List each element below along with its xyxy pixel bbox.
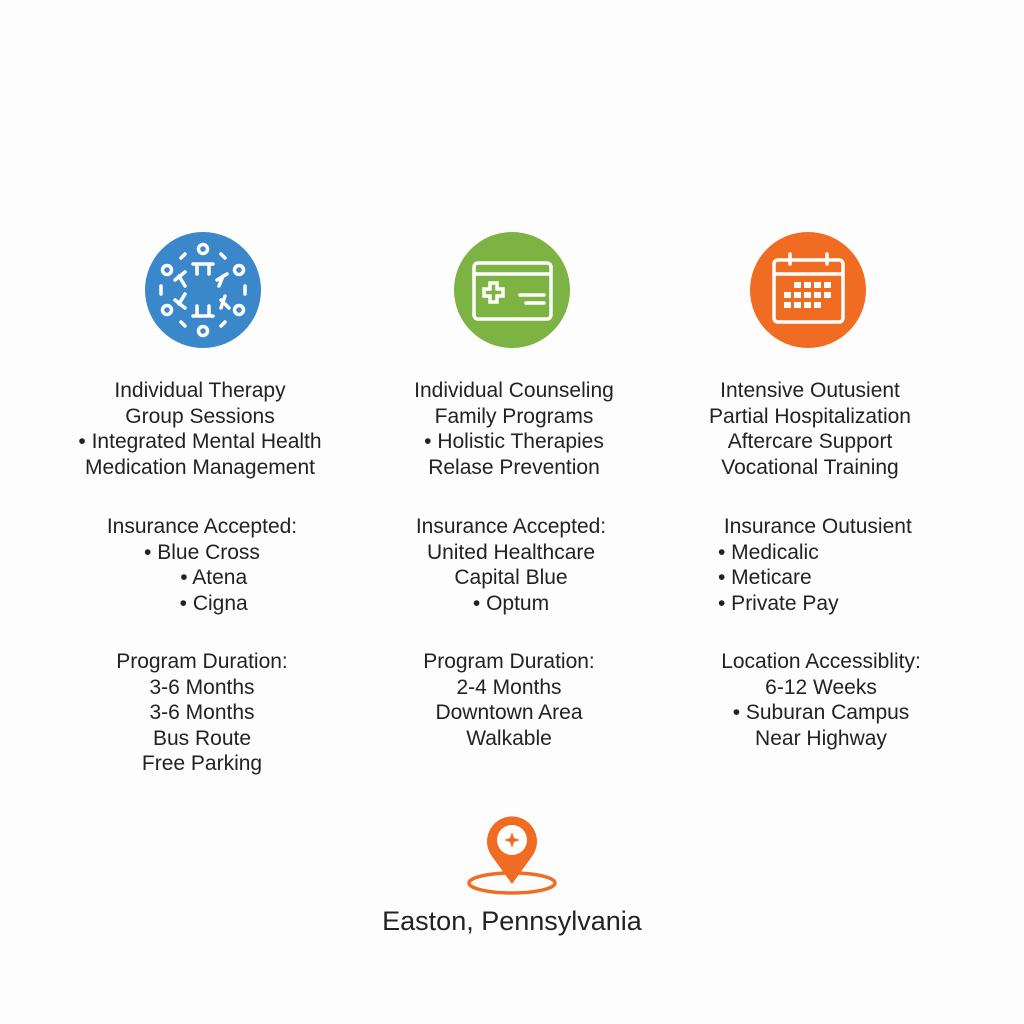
text: column 1 duration: 3-6 Months	[149, 676, 255, 698]
text: column 3 location: • Suburan Campus	[733, 701, 909, 724]
text: column 3 insurance: • Private Pay	[718, 592, 839, 614]
text: column 2 duration	[423, 650, 595, 750]
text: column 1 services	[78, 379, 322, 478]
text: column 1 duration: Program Duration:	[116, 650, 288, 673]
text: column 3 services: Aftercare Support	[728, 430, 892, 453]
text: column 1 duration: Bus Route	[153, 726, 251, 750]
text: column 1 services: Medication Management	[85, 456, 315, 478]
text: column 3 insurance: Insurance Outusient	[724, 515, 912, 538]
text: column 1 duration	[116, 650, 288, 775]
text: column 3 services: Partial Hospitalization	[709, 404, 911, 428]
text: column 2 insurance: Capital Blue	[454, 566, 568, 589]
icon: group circle	[145, 232, 261, 348]
icon: location pin	[467, 816, 557, 895]
text: column 2 duration: Program Duration:	[423, 650, 595, 673]
text: column 1 services: • Integrated Mental Health	[78, 430, 322, 453]
text: column 1 insurance: • Cigna	[180, 592, 248, 614]
text: column 1 insurance: Insurance Accepted:	[107, 515, 297, 538]
text: column 2 services: Relase Prevention	[428, 456, 600, 478]
text: column 1 insurance: • Atena	[180, 566, 247, 589]
text: column 2 services: • Holistic Therapies	[424, 430, 604, 453]
text: column 2 services	[414, 379, 614, 478]
text: column 1 duration: 3-6 Months	[149, 701, 255, 724]
text: column 3 location: Location Accessiblity:	[721, 650, 921, 673]
text: column 3 services	[709, 379, 911, 478]
icon: calendar	[750, 232, 866, 348]
text: column 1 duration: Free Parking	[142, 752, 262, 775]
text: column 2 services: Individual Counseling	[414, 379, 614, 402]
title: location: Easton, Pennsylvania	[382, 906, 642, 936]
text: column 2 insurance: United Healthcare	[427, 540, 595, 564]
text: column 2 services: Family Programs	[435, 404, 593, 428]
text: column 3 insurance	[718, 515, 912, 614]
text: column 3 services: Intensive Outusient	[720, 379, 900, 402]
text: column 3 location	[721, 650, 921, 750]
text: column 3 location: 6-12 Weeks	[765, 676, 877, 698]
text: column 1 insurance: • Blue Cross	[144, 540, 260, 564]
text: column 1 services: Group Sessions	[125, 404, 275, 428]
text: column 1 insurance	[107, 515, 297, 614]
icon: insurance card	[454, 232, 570, 348]
text: column 3 location: Near Highway	[755, 726, 887, 750]
text: column 1 services: Individual Therapy	[114, 379, 286, 402]
text: column 3 insurance: • Meticare	[718, 566, 812, 589]
text: column 2 insurance: • Optum	[473, 592, 549, 614]
text: column 2 duration: Downtown Area	[435, 701, 583, 724]
text: column 3 insurance: • Medicalic	[718, 540, 819, 564]
text: column 2 insurance: Insurance Accepted:	[416, 515, 606, 538]
text: column 2 duration: Walkable	[466, 726, 552, 750]
text: column 3 services: Vocational Training	[721, 456, 899, 478]
text: column 2 insurance	[416, 515, 606, 614]
text: column 2 duration: 2-4 Months	[456, 676, 562, 698]
